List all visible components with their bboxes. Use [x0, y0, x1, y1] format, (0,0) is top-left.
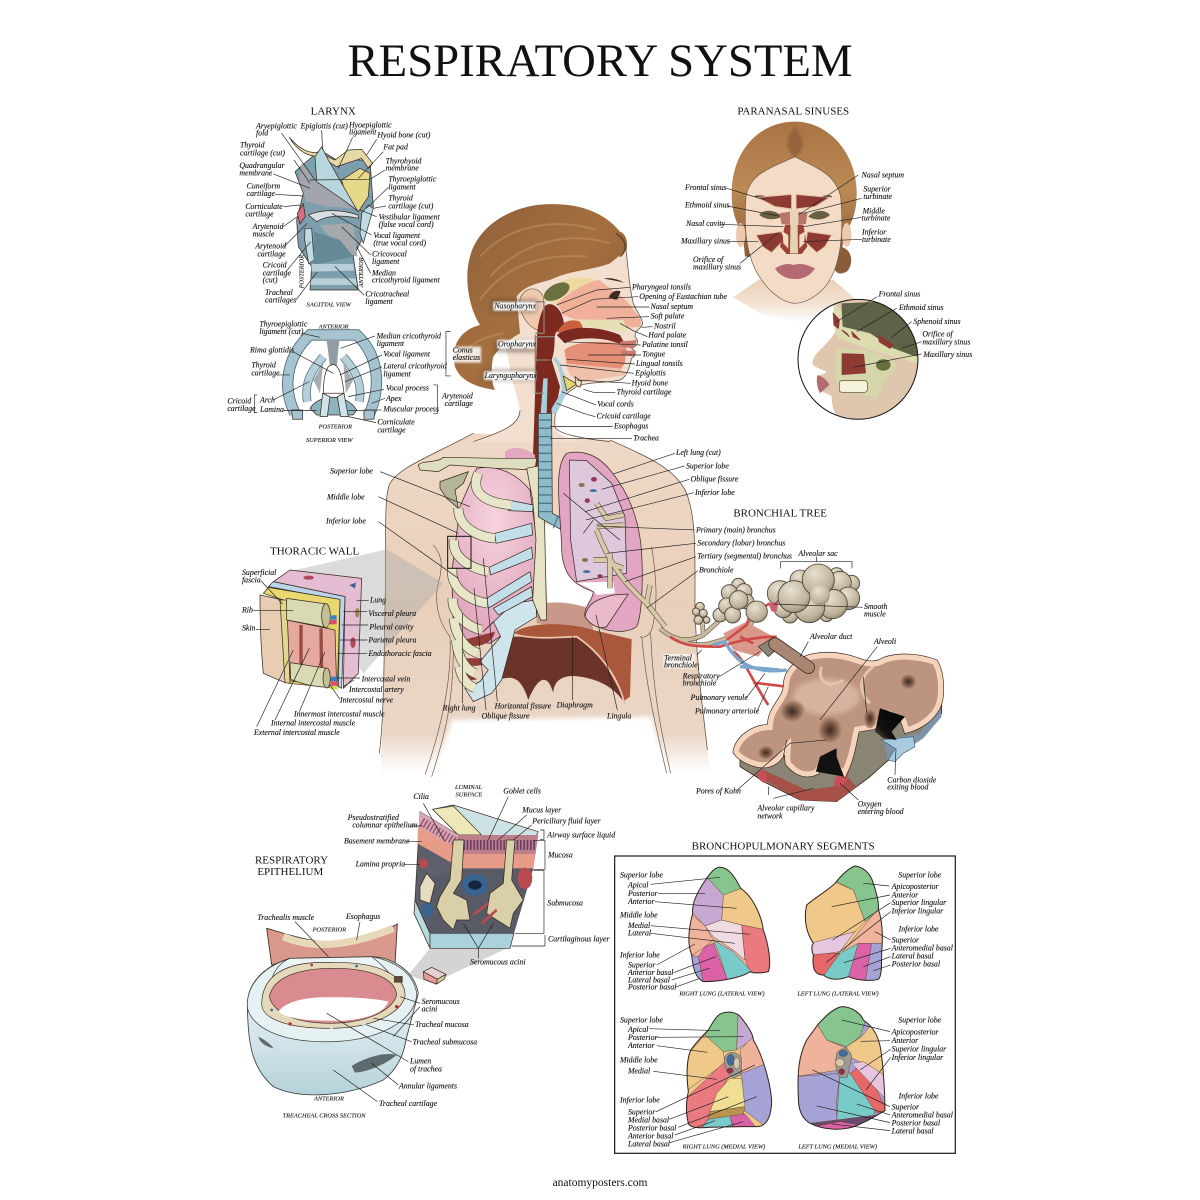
labels: larynx superior view: SUPERIOR VIEW — [306, 437, 353, 444]
heading: paranasal sinuses: PARANASAL SINUSES — [737, 105, 849, 117]
labels: larynx superior view: Muscular process — [382, 404, 439, 413]
labels: larynx sagittal view: (false vocal cord) — [379, 220, 434, 229]
panel: bronchial tree — [660, 508, 942, 820]
labels: respiratory epithelium: Annular ligaments — [398, 1081, 457, 1090]
illustration: smooth muscle band — [768, 602, 778, 612]
labels: bronchial tree: Pulmonary arteriole — [694, 706, 760, 715]
labels: head and neck: Thyroid cartilage — [617, 388, 672, 397]
labels: larynx sagittal view: fold — [256, 128, 268, 137]
labels: lateral views: Apical — [627, 881, 648, 890]
labels: head and neck: Opening of Eustachian tube — [639, 292, 727, 301]
labels: respiratory epithelium: Cartilaginous layer — [548, 934, 610, 943]
panel: larynx — [227, 106, 473, 444]
labels: medial views: Anterior — [891, 1036, 919, 1045]
labels: lateral views: Superior lobe — [898, 870, 942, 879]
labels: respiratory epithelium: SURFACE — [456, 792, 482, 799]
labels: larynx sagittal view: Cricotracheal — [365, 290, 409, 299]
labels: pharynx glow: elasticus — [453, 353, 480, 362]
labels: larynx superior view: ANTERIOR — [318, 324, 349, 331]
labels: larynx sagittal view: Median — [371, 268, 396, 277]
heading: bronchopulmonary segments: BRONCHOPULMONARY SEGMENTS — [692, 840, 875, 852]
labels: pharynx glow: Laryngopharynx — [484, 371, 537, 380]
labels: thoracic wall: Parietal pleura — [367, 636, 416, 645]
labels: larynx superior view: ligament — [377, 339, 405, 348]
labels: paranasal sinuses: Ethmoid sinus — [684, 200, 730, 209]
labels: bronchial tree: Oxygen — [858, 800, 882, 809]
labels: respiratory epithelium: Tracheal cartilage — [379, 1099, 438, 1108]
labels: paranasal sinuses: maxillary sinus — [922, 337, 970, 346]
labels: larynx sagittal view: cartilage (cut) — [240, 148, 285, 157]
labels: paranasal sinuses: Maxillary sinus — [680, 236, 730, 245]
labels: lungs: Oblique fissure — [691, 475, 739, 484]
labels: lateral views: Inferior lobe — [619, 950, 660, 959]
labels: larynx superior view: Lateral cricothyroid — [382, 362, 447, 371]
labels: respiratory epithelium: columnar epithelium — [352, 821, 418, 830]
labels: thoracic wall: Endothoracic fascia — [367, 649, 432, 658]
labels: thoracic wall: Innermost intercostal muscle — [293, 710, 385, 719]
labels: paranasal sinuses: Maxillary sinus — [922, 350, 972, 359]
labels: bronchial tree: bronchiole — [683, 678, 717, 687]
diaphragm — [497, 523, 632, 703]
labels: lateral views: Lateral basal — [627, 975, 670, 984]
labels: larynx superior view: cartilage — [227, 404, 256, 413]
labels: lateral views: Anterior — [891, 890, 919, 899]
labels: larynx sagittal view: Hyoid bone (cut) — [376, 130, 431, 139]
labels: lateral views: RIGHT LUNG (LATERAL VIEW) — [678, 991, 764, 998]
labels: medial views: Posterior — [627, 1033, 659, 1042]
labels: lateral views: Lateral basal — [891, 952, 934, 961]
labels: respiratory epithelium — [257, 784, 615, 1119]
labels: paranasal sinuses: Orifice of — [693, 255, 725, 264]
labels: medial views: Lateral basal — [891, 1126, 934, 1135]
labels: lungs: Secondary (lobar) bronchus — [697, 539, 785, 548]
labels: paranasal sinuses: Frontal sinus — [878, 290, 920, 299]
labels: bronchial tree: Pores of Kohn — [695, 787, 741, 796]
labels: paranasal sinuses: maxillary sinus — [693, 262, 741, 271]
illustration: sagittal skull inset — [798, 299, 920, 419]
labels: head and neck: Epiglottis — [634, 369, 666, 378]
labels: lungs: Tertiary (segmental) bronchus — [697, 552, 792, 561]
labels: larynx sagittal view: muscle — [253, 229, 275, 238]
labels: bronchial tree: Carbon dioxide — [887, 775, 937, 784]
heading: thoracic wall: THORACIC WALL — [270, 545, 359, 557]
labels: head and neck: Esophagus — [613, 422, 648, 431]
hair and bun — [454, 204, 627, 390]
labels: larynx superior view: Apex — [385, 394, 402, 403]
labels: larynx superior view: Arch — [259, 396, 275, 405]
labels: larynx superior view: Thyroid — [251, 361, 276, 370]
labels: larynx superior view: ligament (cut) — [259, 327, 304, 336]
labels: lateral views: Superior — [628, 961, 656, 970]
labels: medial views: Inferior lingular — [891, 1053, 944, 1062]
labels: lateral views: Middle lobe — [619, 910, 658, 919]
labels: larynx superior view: Median cricothyroid — [376, 331, 441, 340]
labels: medial views: Superior lobe — [620, 1015, 663, 1024]
illustration: vessels and bronchioles — [660, 603, 787, 705]
labels: larynx sagittal view: (true vocal cord) — [373, 238, 426, 247]
labels: medial views: Anterior basal — [627, 1132, 673, 1141]
labels: lateral views: Inferior lobe — [898, 925, 939, 934]
arrow: oxygen flow down-left — [816, 748, 844, 777]
labels: paranasal sinuses: Middle — [862, 206, 885, 215]
panel: bronchopulmonary segments — [615, 840, 955, 1153]
labels: thoracic wall: Rib — [241, 606, 253, 615]
labels: paranasal sinuses: Sphenoid sinus — [913, 317, 961, 326]
labels: bronchial tree: Smooth — [864, 602, 888, 611]
labels: lungs: Superior lobe — [686, 461, 729, 470]
labels: paranasal sinuses: turbinate — [862, 214, 891, 223]
labels: respiratory epithelium: Mucosa — [547, 850, 573, 859]
labels: larynx sagittal view: Tracheal — [265, 288, 293, 297]
labels: paranasal sinuses: Inferior — [861, 228, 887, 237]
labels: larynx sagittal view: Cricovocal — [372, 250, 407, 259]
labels: larynx sagittal view: ANTERIOR — [358, 257, 365, 288]
labels: lateral views: Posterior basal — [627, 983, 676, 992]
labels: larynx sagittal view: membrane — [239, 168, 273, 177]
labels: lungs: Inferior lobe — [694, 488, 735, 497]
labels: medial views: Anterior — [627, 1041, 655, 1050]
heading: bronchial tree: BRONCHIAL TREE — [733, 508, 827, 520]
labels: larynx superior view: Vocal ligament — [383, 350, 431, 359]
labels: respiratory epithelium: Lamina propria — [355, 860, 405, 869]
labels: lungs: Right lung — [442, 704, 476, 713]
eye — [604, 278, 624, 300]
labels: respiratory epithelium: Pseudostratified — [347, 813, 399, 822]
labels: pharynx glow — [452, 300, 555, 393]
labels: lateral views — [619, 870, 953, 998]
labels: respiratory epithelium: of trachea — [410, 1065, 442, 1074]
labels: head and neck: Vocal cords — [597, 400, 634, 409]
title: RESPIRATORY SYSTEM — [348, 35, 852, 87]
labels: respiratory epithelium: acini — [422, 1005, 437, 1014]
labels: medial views: Posterior basal — [627, 1124, 676, 1133]
labels: respiratory epithelium: Tracheal submucosa — [413, 1037, 477, 1046]
labels: respiratory epithelium: TREACHEAL CROSS SECTION — [283, 1112, 366, 1119]
labels: larynx sagittal view: cricothyroid ligament — [372, 276, 441, 285]
heading: larynx: LARYNX — [311, 106, 356, 118]
labels: larynx sagittal view: membrane — [386, 164, 419, 173]
labels: bronchial tree: Alveolar capillary — [756, 804, 815, 813]
labels: thoracic wall: Skin — [242, 624, 256, 633]
icon: sample cube — [423, 967, 446, 984]
labels: thoracic wall: Internal intercostal muscle — [270, 718, 356, 727]
labels: head and neck: Palatine tonsil — [641, 340, 688, 349]
labels: larynx sagittal view: (cut) — [263, 276, 278, 285]
labels: lateral views: Apicoposterior — [891, 882, 940, 891]
labels: lateral views: Medial — [627, 921, 650, 930]
zoom wedge — [288, 549, 443, 673]
labels: larynx sagittal view: Arytenoid — [254, 242, 286, 251]
labels: bronchial tree: bronchiole — [664, 661, 698, 670]
labels: head and neck: Nasal septum — [650, 302, 693, 311]
labels: respiratory epithelium: Mucus layer — [521, 805, 562, 814]
heading: respiratory epithelium — [255, 854, 328, 878]
labels: head and neck: Hyoid bone — [631, 378, 668, 387]
labels: thoracic wall: Superficial — [242, 568, 276, 577]
labels: medial views: Medial basal — [627, 1116, 669, 1125]
labels: lateral views: Anterior basal — [627, 968, 673, 977]
labels: thoracic wall — [241, 568, 432, 737]
illustration: larynx sagittal view — [289, 137, 373, 290]
chart: right lung medial view — [683, 1008, 775, 1130]
labels: lateral views: Lateral — [627, 929, 651, 938]
labels: respiratory epithelium: ANTERIOR — [313, 1096, 344, 1103]
labels: respiratory epithelium: Airway surface liquid — [546, 830, 615, 839]
labels: larynx superior view: Vocal process — [386, 384, 429, 393]
labels: bronchial tree: Alveoli — [873, 637, 896, 646]
labels: larynx sagittal view: cartilage — [247, 189, 275, 198]
labels: head and neck: Lingual tonsils — [635, 359, 683, 368]
labels: lateral views: Anteromedial basal — [891, 943, 953, 952]
labels: respiratory epithelium: Seromucous — [422, 997, 460, 1006]
labels: respiratory epithelium: Periciliary fluid layer — [531, 816, 602, 825]
labels: bronchial tree: Pulmonary venule — [690, 693, 748, 702]
ear — [520, 289, 545, 331]
labels: bronchial tree — [663, 549, 937, 820]
labels: larynx superior view: Lamina — [259, 405, 284, 414]
labels: medial views: Anteromedial basal — [891, 1110, 953, 1119]
labels: larynx superior view — [227, 320, 473, 444]
labels: lungs: Lingula — [606, 711, 631, 720]
heading: respiratory epithelium: EPITHELIUM — [257, 866, 323, 878]
labels: medial views: Apicoposterior — [891, 1027, 940, 1036]
labels: pharynx glow: Oropharynx — [498, 340, 536, 349]
labels: lungs — [325, 448, 792, 720]
labels: medial views: Superior lingular — [892, 1045, 947, 1054]
footer: source: anatomyposters.com — [553, 1177, 647, 1189]
labels: respiratory epithelium: POSTERIOR — [312, 927, 346, 934]
labels: medial views: Lateral basal — [627, 1139, 670, 1148]
labels: larynx sagittal view: Cricoid — [263, 260, 287, 269]
labels: medial views: Superior — [892, 1102, 920, 1111]
labels: larynx sagittal view: POSTERIOR — [298, 255, 305, 289]
panel: paranasal sinuses — [680, 105, 972, 419]
labels: larynx superior view: ligament — [383, 369, 412, 378]
labels: thoracic wall: Pleural cavity — [368, 622, 414, 631]
labels: larynx superior view: cartilage — [251, 368, 280, 377]
panel: thoracic wall — [241, 545, 443, 737]
labels: lateral views: Superior — [892, 935, 920, 944]
labels: medial views: Posterior basal — [891, 1118, 940, 1127]
labels: lateral views: Posterior — [627, 889, 659, 898]
labels: bronchial tree: Alveolar duct — [809, 632, 853, 641]
labels: larynx sagittal view: cartilages — [265, 295, 296, 304]
labels: larynx sagittal view: Fat pad — [382, 142, 408, 151]
illustration: esophagus — [267, 924, 397, 965]
labels: respiratory epithelium: Goblet cells — [503, 786, 541, 795]
labels: lateral views: Posterior basal — [891, 960, 940, 969]
chart: left lung lateral view — [804, 866, 883, 981]
chest: right lung, ribs, sternum, clavicle — [418, 448, 547, 702]
left lung cut — [559, 452, 665, 631]
labels: larynx sagittal view: ligament — [372, 257, 400, 266]
labels: paranasal sinuses: Nasal septum — [861, 170, 904, 179]
labels: lungs: Diaphragm — [556, 701, 593, 710]
labels: larynx sagittal view: cartilage — [263, 268, 291, 277]
illustration: alveolar sacs — [692, 564, 860, 624]
illustration: epithelium block — [408, 805, 538, 985]
labels: larynx superior view: Corniculate — [377, 418, 415, 427]
labels: respiratory epithelium: Submucosa — [547, 898, 583, 907]
labels: bronchial tree: exiting blood — [887, 783, 928, 792]
labels: head and neck: Soft palate — [651, 312, 685, 321]
illustration: tracheal ring — [247, 928, 418, 1095]
labels: head and neck: Pharyngeal tonsils — [631, 282, 691, 291]
labels: paranasal sinuses: Ethmoid sinus — [898, 303, 944, 312]
labels: pharynx glow: Nasopharynx — [493, 302, 537, 311]
labels: bronchial tree: muscle — [864, 610, 886, 619]
labels: bronchial tree: network — [757, 811, 783, 820]
labels: larynx sagittal view: Hyoepiglottic — [348, 120, 392, 129]
labels: respiratory epithelium: Tracheal mucosa — [415, 1020, 469, 1029]
labels: bronchial tree: Alveolar sac — [797, 549, 838, 558]
labels: medial views: Medial — [627, 1066, 650, 1075]
labels: larynx sagittal view: SAGITTAL VIEW — [307, 302, 352, 309]
labels: thoracic wall: External intercostal muscle — [253, 728, 340, 737]
labels: lungs: Primary (main) bronchus — [695, 526, 776, 535]
labels: larynx sagittal view: Vocal ligament — [373, 231, 421, 240]
labels: larynx superior view: Rima glottidis — [249, 345, 294, 354]
labels: medial views: RIGHT LUNG (MEDIAL VIEW) — [682, 1144, 765, 1151]
panel: human figure with airway and lungs — [325, 204, 792, 777]
labels: larynx sagittal view: ligament — [388, 182, 417, 191]
labels: respiratory epithelium: Esophagus — [345, 912, 380, 921]
labels: medial views: Apical — [627, 1025, 648, 1034]
labels: head and neck: Cricoid cartilage — [597, 411, 651, 420]
labels: medial views: Inferior lobe — [898, 1092, 939, 1101]
labels: lateral views: LEFT LUNG (LATERAL VIEW) — [796, 991, 879, 998]
labels: larynx superior view: cartilage — [377, 425, 406, 434]
labels: respiratory epithelium: Lumen — [409, 1057, 431, 1066]
arrow: oxygen flow up-right — [875, 708, 905, 740]
labels: larynx sagittal view: Aryepiglottic — [255, 121, 297, 130]
labels: head and neck: Tongue — [642, 350, 666, 359]
labels: respiratory epithelium: LUMINAL — [454, 784, 483, 791]
labels: head and neck: Hard palate — [647, 330, 687, 339]
labels: medial views: LEFT LUNG (MEDIAL VIEW) — [797, 1144, 877, 1151]
labels: paranasal sinuses: Nasal cavity — [685, 219, 725, 228]
labels: larynx sagittal view — [239, 120, 441, 309]
labels: bronchial tree: Terminal — [664, 653, 692, 662]
labels: larynx sagittal view: Quadrangular — [239, 161, 286, 170]
heading: respiratory epithelium: RESPIRATORY — [255, 854, 328, 866]
labels: respiratory epithelium: Trachealis muscle — [257, 913, 315, 922]
labels: larynx sagittal view: Vestibular ligament — [379, 212, 441, 221]
labels: head and neck — [550, 282, 727, 443]
panel: respiratory epithelium — [247, 784, 615, 1119]
labels: larynx sagittal view: Thyrohyoid — [386, 156, 422, 165]
labels: pharynx glow: Conus — [453, 346, 473, 355]
labels: larynx superior view: Arytenoid — [441, 391, 473, 400]
illustration: larynx superior view — [288, 335, 376, 419]
labels: head and neck: Trachea — [633, 434, 659, 443]
labels: lateral views: Anterior — [627, 897, 655, 906]
labels: medial views: Superior lobe — [898, 1015, 942, 1024]
labels: lungs: Superior lobe — [330, 466, 373, 475]
labels: paranasal sinuses: turbinate — [863, 192, 893, 201]
labels: larynx sagittal view: ligament — [349, 128, 377, 137]
labels: larynx sagittal view: cartilage (cut) — [388, 201, 434, 210]
labels: paranasal sinuses: turbinate — [862, 235, 891, 244]
nasal cavity and oral structures — [533, 278, 641, 467]
labels: thoracic wall: Intercostal nerve — [339, 696, 393, 705]
labels: paranasal sinuses: Orifice of — [922, 330, 954, 339]
labels: medial views: Inferior lobe — [619, 1095, 660, 1104]
labels: larynx superior view: cartilage — [445, 399, 473, 408]
chart: right lung lateral view — [685, 863, 773, 983]
frame — [615, 856, 955, 1153]
labels: larynx sagittal view: cartilage — [245, 209, 274, 218]
labels: larynx superior view: Cricoid — [227, 396, 251, 405]
head and neck — [454, 204, 643, 467]
labels: bronchial tree: entering blood — [858, 807, 904, 816]
labels: larynx superior view: POSTERIOR — [318, 423, 352, 430]
labels: lungs: Left lung (cut) — [675, 448, 721, 457]
labels: medial views — [619, 1015, 953, 1151]
labels: larynx sagittal view: Arytenoid — [252, 222, 284, 231]
labels: thoracic wall: Intercostal artery — [348, 685, 404, 694]
labels: respiratory epithelium: Basement membrane — [344, 836, 410, 845]
labels: bronchial tree: Respiratory — [682, 671, 720, 680]
trachea and left bronchus — [538, 413, 600, 540]
labels: paranasal sinuses — [680, 170, 972, 367]
labels: head and neck: Nostril — [653, 321, 676, 330]
labels: larynx sagittal view: ligament — [365, 297, 394, 306]
labels: respiratory epithelium: Seromucous acini — [470, 957, 526, 966]
labels: larynx sagittal view: Corniculate — [245, 202, 283, 211]
labels: larynx sagittal view: Thyroepiglottic — [388, 175, 437, 184]
illustration: alveolus section — [736, 637, 942, 802]
labels: lateral views: Inferior lingular — [891, 906, 944, 915]
labels: lungs: Middle lobe — [326, 492, 365, 501]
labels: lateral views: Superior lobe — [620, 870, 663, 879]
labels: respiratory epithelium: Cilia — [413, 792, 429, 801]
torso and arms — [379, 433, 710, 777]
labels: larynx sagittal view: Epiglottis (cut) — [300, 121, 348, 130]
labels: thoracic wall: Intercostal vein — [361, 674, 410, 683]
labels: lungs: Inferior lobe — [325, 516, 366, 525]
labels: larynx sagittal view: Cuneiform — [247, 181, 280, 190]
labels: paranasal sinuses: Frontal sinus — [684, 183, 727, 192]
labels: larynx sagittal view: Thyroid — [388, 194, 413, 203]
labels: paranasal sinuses: Superior — [863, 185, 892, 194]
labels: thoracic wall: Visceral pleura — [368, 609, 416, 618]
labels: medial views: Middle lobe — [619, 1055, 658, 1064]
labels: lungs: Oblique fissure — [482, 711, 530, 720]
labels: larynx sagittal view: Thyroid — [240, 141, 265, 150]
labels: lungs: Horizontal fissure — [494, 701, 552, 710]
labels: thoracic wall: fascia — [242, 576, 261, 585]
labels: lungs: Bronchiole — [699, 566, 734, 575]
labels: medial views: Superior — [628, 1107, 656, 1116]
illustration: face with sinuses — [732, 122, 857, 323]
labels: lateral views: Superior lingular — [892, 898, 947, 907]
chart: left lung medial view — [795, 1003, 887, 1132]
labels: larynx superior view: Thyroepiglottic — [259, 320, 308, 329]
labels: larynx sagittal view: cartilage — [257, 250, 286, 259]
illustration: thoracic wall block — [260, 570, 362, 689]
labels: thoracic wall: Lung — [369, 595, 386, 604]
